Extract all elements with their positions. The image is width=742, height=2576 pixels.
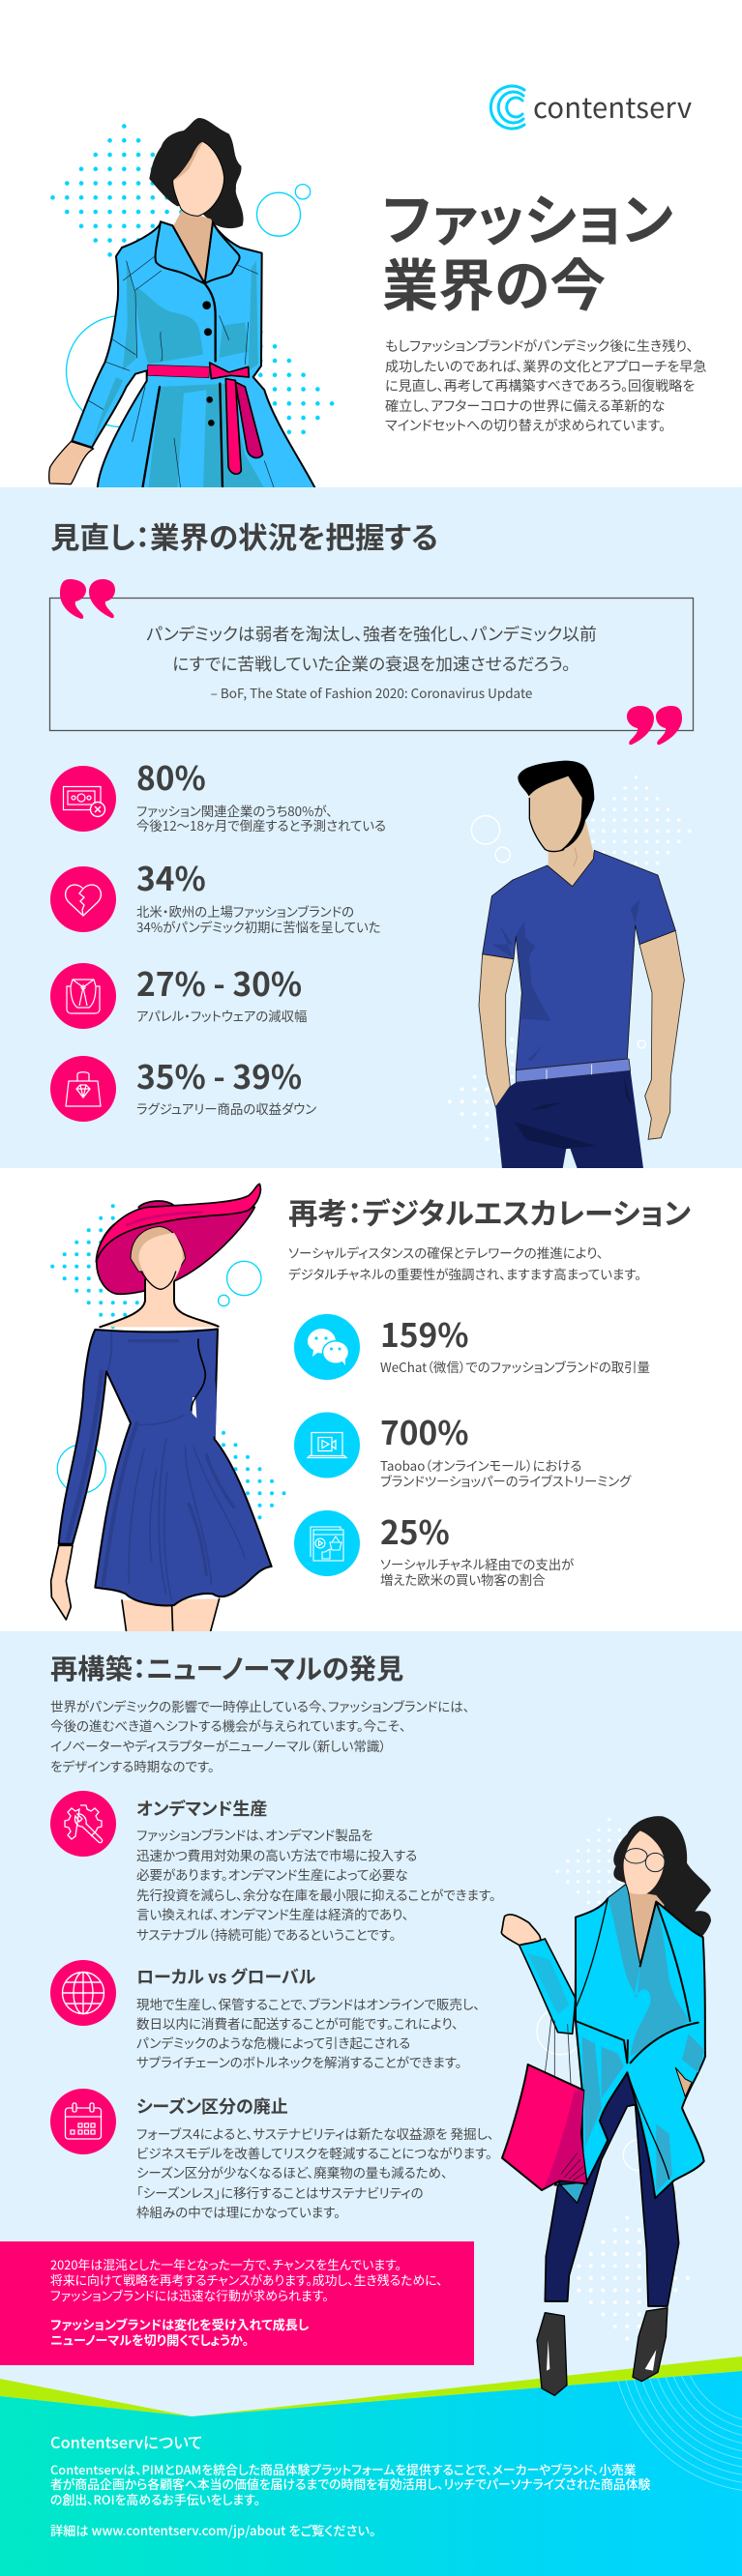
stat: 34% <box>136 853 380 936</box>
decorative circles <box>537 2008 654 2171</box>
intro text: 確立し、アフターコロナの世界に備える革新的な <box>385 396 665 416</box>
title: ファッション <box>382 175 673 256</box>
section: seasonless: シーズン区分の廃止 <box>136 2093 288 2119</box>
quote box <box>50 598 693 731</box>
section: local vs global: パンデミックのような危機によって引き起こされる <box>136 2033 410 2052</box>
quote text: – BoF, The State of Fashion 2020: Coronavirus Update <box>211 683 532 702</box>
stat: 27% - 30%: アパレル・フットウェアの減収幅 <box>136 1006 307 1025</box>
stat: 159% <box>380 1309 650 1376</box>
callout: pink box: 将来に向けて戦略を再考するチャンスがあります。成功し、生き残るために、 <box>50 2270 443 2289</box>
icon: globe <box>62 1973 104 2013</box>
intro text: に見直し、再考して再構築すべきであろう。回復戦略を <box>385 376 695 395</box>
footer band: green <box>0 2356 742 2416</box>
dot pattern: upper left <box>47 121 201 275</box>
quote mark: close <box>627 706 682 745</box>
icon: social shopping window <box>311 1527 343 1561</box>
section: local vs global: 数日以内に消費者に配送することが可能です。これにより、 <box>136 2013 459 2033</box>
title <box>382 175 673 322</box>
icon: broken heart <box>66 885 101 916</box>
callout: pink box: 2020年は混沌とした一年となった一方で、チャンスを生んでいます。 <box>50 2255 401 2273</box>
decorative circles <box>66 185 311 427</box>
heading: 再考：デジタルエスカレーション <box>288 1189 691 1232</box>
intro text: マインドセットへの切り替えが求められています。 <box>385 416 666 435</box>
stat: 700%: 700% <box>380 1407 469 1454</box>
intro text: ソーシャルディスタンスの確保とテレワークの推進により、 <box>288 1243 604 1262</box>
callout: pink box <box>0 2241 474 2365</box>
section: on-demand production: ファッションブランドは、オンデマンド製品を <box>136 1825 373 1844</box>
section: on-demand production: 迅速かつ費用対効果の高い方法で市場に投入する <box>136 1845 417 1864</box>
dots: white diamonds <box>578 773 694 889</box>
intro text: もしファッションブランドがパンデミック後に生き残り、 <box>385 337 694 356</box>
section: seasonless: ビジネスモデルを改善してリスクを軽減することにつながります。 <box>136 2143 492 2162</box>
stat: 700%: Taobao（オンラインモール）における <box>380 1455 581 1475</box>
stat circles with icons <box>50 766 116 1122</box>
stat: 25%: 増えた欧米の買い物客の割合 <box>380 1569 545 1589</box>
panel: review <box>0 487 742 1168</box>
stat: 80%: 今後12〜18ヶ月で倒産すると予測されている <box>136 815 386 834</box>
stat: 25% <box>380 1507 574 1589</box>
logo wordmark: contentserv <box>533 86 692 127</box>
section: on-demand production <box>136 1796 496 1944</box>
stat: 700%: ブランドツーショッパーのライブストリーミング <box>380 1471 631 1490</box>
heading: 見直し：業界の状況を把握する <box>50 514 438 557</box>
section: on-demand production: サステナブル（持続可能）であるということです。 <box>136 1924 396 1944</box>
icon: shirt <box>67 980 100 1013</box>
stat: 80%: 80% <box>136 752 206 799</box>
stat: 25%: ソーシャルチャネル経由での支出が <box>380 1554 574 1573</box>
quote mark: open <box>60 579 115 619</box>
stat: 80% <box>136 752 386 834</box>
illustration: man in blue t-shirt <box>479 761 684 1168</box>
intro text: 成功したいのであれば、業界の文化とアプローチを早急 <box>385 357 706 376</box>
footer band: gradient <box>0 2371 742 2576</box>
footer text: 者が商品企画から各顧客へ本当の価値を届けるまでの時間を有効活用し、リッチでパーソナライズされた商品体験 <box>50 2474 650 2493</box>
section: local vs global: サプライチェーンのボトルネックを解消することができます。 <box>136 2052 461 2071</box>
stat: 27% - 30%: 27% - 30% <box>136 958 302 1006</box>
intro text: をデザインする時期なのです。 <box>50 1756 215 1775</box>
section: local vs global: 現地で生産し、保管することで、ブランドはオンラインで販売し、 <box>136 1994 480 2013</box>
illustration: woman in blue shirt dress <box>49 118 316 490</box>
callout: pink box: ニューノーマルを切り開くでしょうか。 <box>50 2330 249 2349</box>
icon: calendar <box>66 2103 101 2139</box>
intro text: 世界がパンデミックの影響で一時停止している今、ファッションブランドには、 <box>50 1696 470 1715</box>
panel: rebuild <box>0 1631 742 2576</box>
stat: 80%: ファッション関連企業のうち80%が、 <box>136 801 333 820</box>
section: seasonless: 枠組みの中では理にかなっています。 <box>136 2202 341 2221</box>
stat: 27% - 30% <box>136 958 307 1025</box>
heading: 再構築：ニューノーマルの発見 <box>50 1648 403 1687</box>
section: on-demand production: 先行投資を減らし、余分な在庫を最小限に抑えることができます。 <box>136 1885 496 1904</box>
icon: gear and wrench <box>65 1805 103 1843</box>
concentric arcs <box>617 2375 742 2491</box>
section: seasonless: シーズン区分が少なくなるほど、廃棄物の量も減るため、 <box>136 2162 448 2181</box>
icon: laptop with video <box>308 1433 346 1458</box>
stat: 700% <box>380 1407 632 1490</box>
title: 業界の今 <box>382 241 606 322</box>
footer text <box>50 2430 650 2539</box>
stat: 35% - 39% <box>136 1051 316 1118</box>
logo icon <box>490 86 524 129</box>
decorative circles <box>57 1261 261 1493</box>
stat: 159%: 159% <box>380 1309 469 1356</box>
stat: 35% - 39%: 35% - 39% <box>136 1051 302 1098</box>
section: on-demand production: 言い換えれば、オンデマンド生産は経済的であり、 <box>136 1904 409 1923</box>
footer text: Contentservについて <box>50 2430 202 2453</box>
stat: 35% - 39%: ラグジュアリー商品の収益ダウン <box>136 1098 316 1118</box>
stat circles with icons <box>294 1314 360 1576</box>
quote text: にすでに苦戦していた企業の衰退を加速させるだろう。 <box>172 650 571 675</box>
intro text: デジタルチャネルの重要性が強調され、ますます高まっています。 <box>288 1264 641 1283</box>
dot pattern: lower right <box>184 327 338 481</box>
icon: banknote crossed <box>64 787 104 816</box>
intro text: 今後の進むべき道へシフトする機会が与えられています。今こそ、 <box>50 1715 406 1735</box>
section: seasonless: 「シーズンレス」に移行することはサステナビリティの <box>136 2182 424 2202</box>
footer text: 詳細は www.contentserv.com/jp/about をご覧ください。 <box>50 2521 376 2539</box>
footer text: Contentservは、PIMとDAMを統合した商品体験プラットフォームを提供することで、メーカーやブランド、小売業 <box>50 2460 637 2478</box>
intro text <box>288 1243 641 1283</box>
quote text <box>146 621 597 702</box>
callout: pink box: ファッションブランドは変化を受け入れて成長し <box>50 2315 309 2333</box>
panel: rethink <box>0 1168 742 1631</box>
footer text: の創出、ROIを高めるお手伝いをします。 <box>50 2490 260 2508</box>
panel: hero <box>0 0 742 487</box>
section: seasonless: フォーブス4によると、サステナビリティは新たな収益源を 発掘し、 <box>136 2123 494 2143</box>
icon circles <box>50 1791 116 2154</box>
illustration: woman with bag and glasses <box>501 1816 711 2395</box>
dots: white diamonds <box>553 1816 693 2344</box>
section: local vs global: ローカル vs グローバル <box>136 1964 315 1989</box>
callout: pink box: ファッションブランドには迅速な行動が求められます。 <box>50 2286 329 2304</box>
section: on-demand production: 必要があります。オンデマンド生産によって必要な <box>136 1864 408 1884</box>
stat: 25%: 25% <box>380 1507 450 1553</box>
stat: 159%: WeChat（微信）でのファッションブランドの取引量 <box>380 1357 650 1376</box>
stat: 34%: 34% <box>136 853 206 900</box>
dot patterns <box>47 1201 289 1559</box>
icon: wechat bubbles <box>308 1329 348 1365</box>
intro text: イノベーターやディスラプターがニューノーマル（新しい常識） <box>50 1736 386 1755</box>
quote text: パンデミックは弱者を淘汰し、強者を強化し、パンデミック以前 <box>146 621 597 646</box>
decorative circles <box>471 816 645 1048</box>
illustration: woman in hat and blue dress <box>51 1184 272 1632</box>
intro text <box>50 1696 470 1775</box>
intro text <box>385 337 706 435</box>
section: on-demand production: オンデマンド生産 <box>136 1796 267 1821</box>
section: local vs global <box>136 1964 480 2071</box>
stat: 34%: 34%がパンデミック初期に苦悩を呈していた <box>136 917 380 936</box>
section: seasonless <box>136 2093 494 2221</box>
stat: 34%: 北米・欧州の上場ファッションブランドの <box>136 901 354 921</box>
icon: shopping bag with diamond <box>66 1072 101 1106</box>
